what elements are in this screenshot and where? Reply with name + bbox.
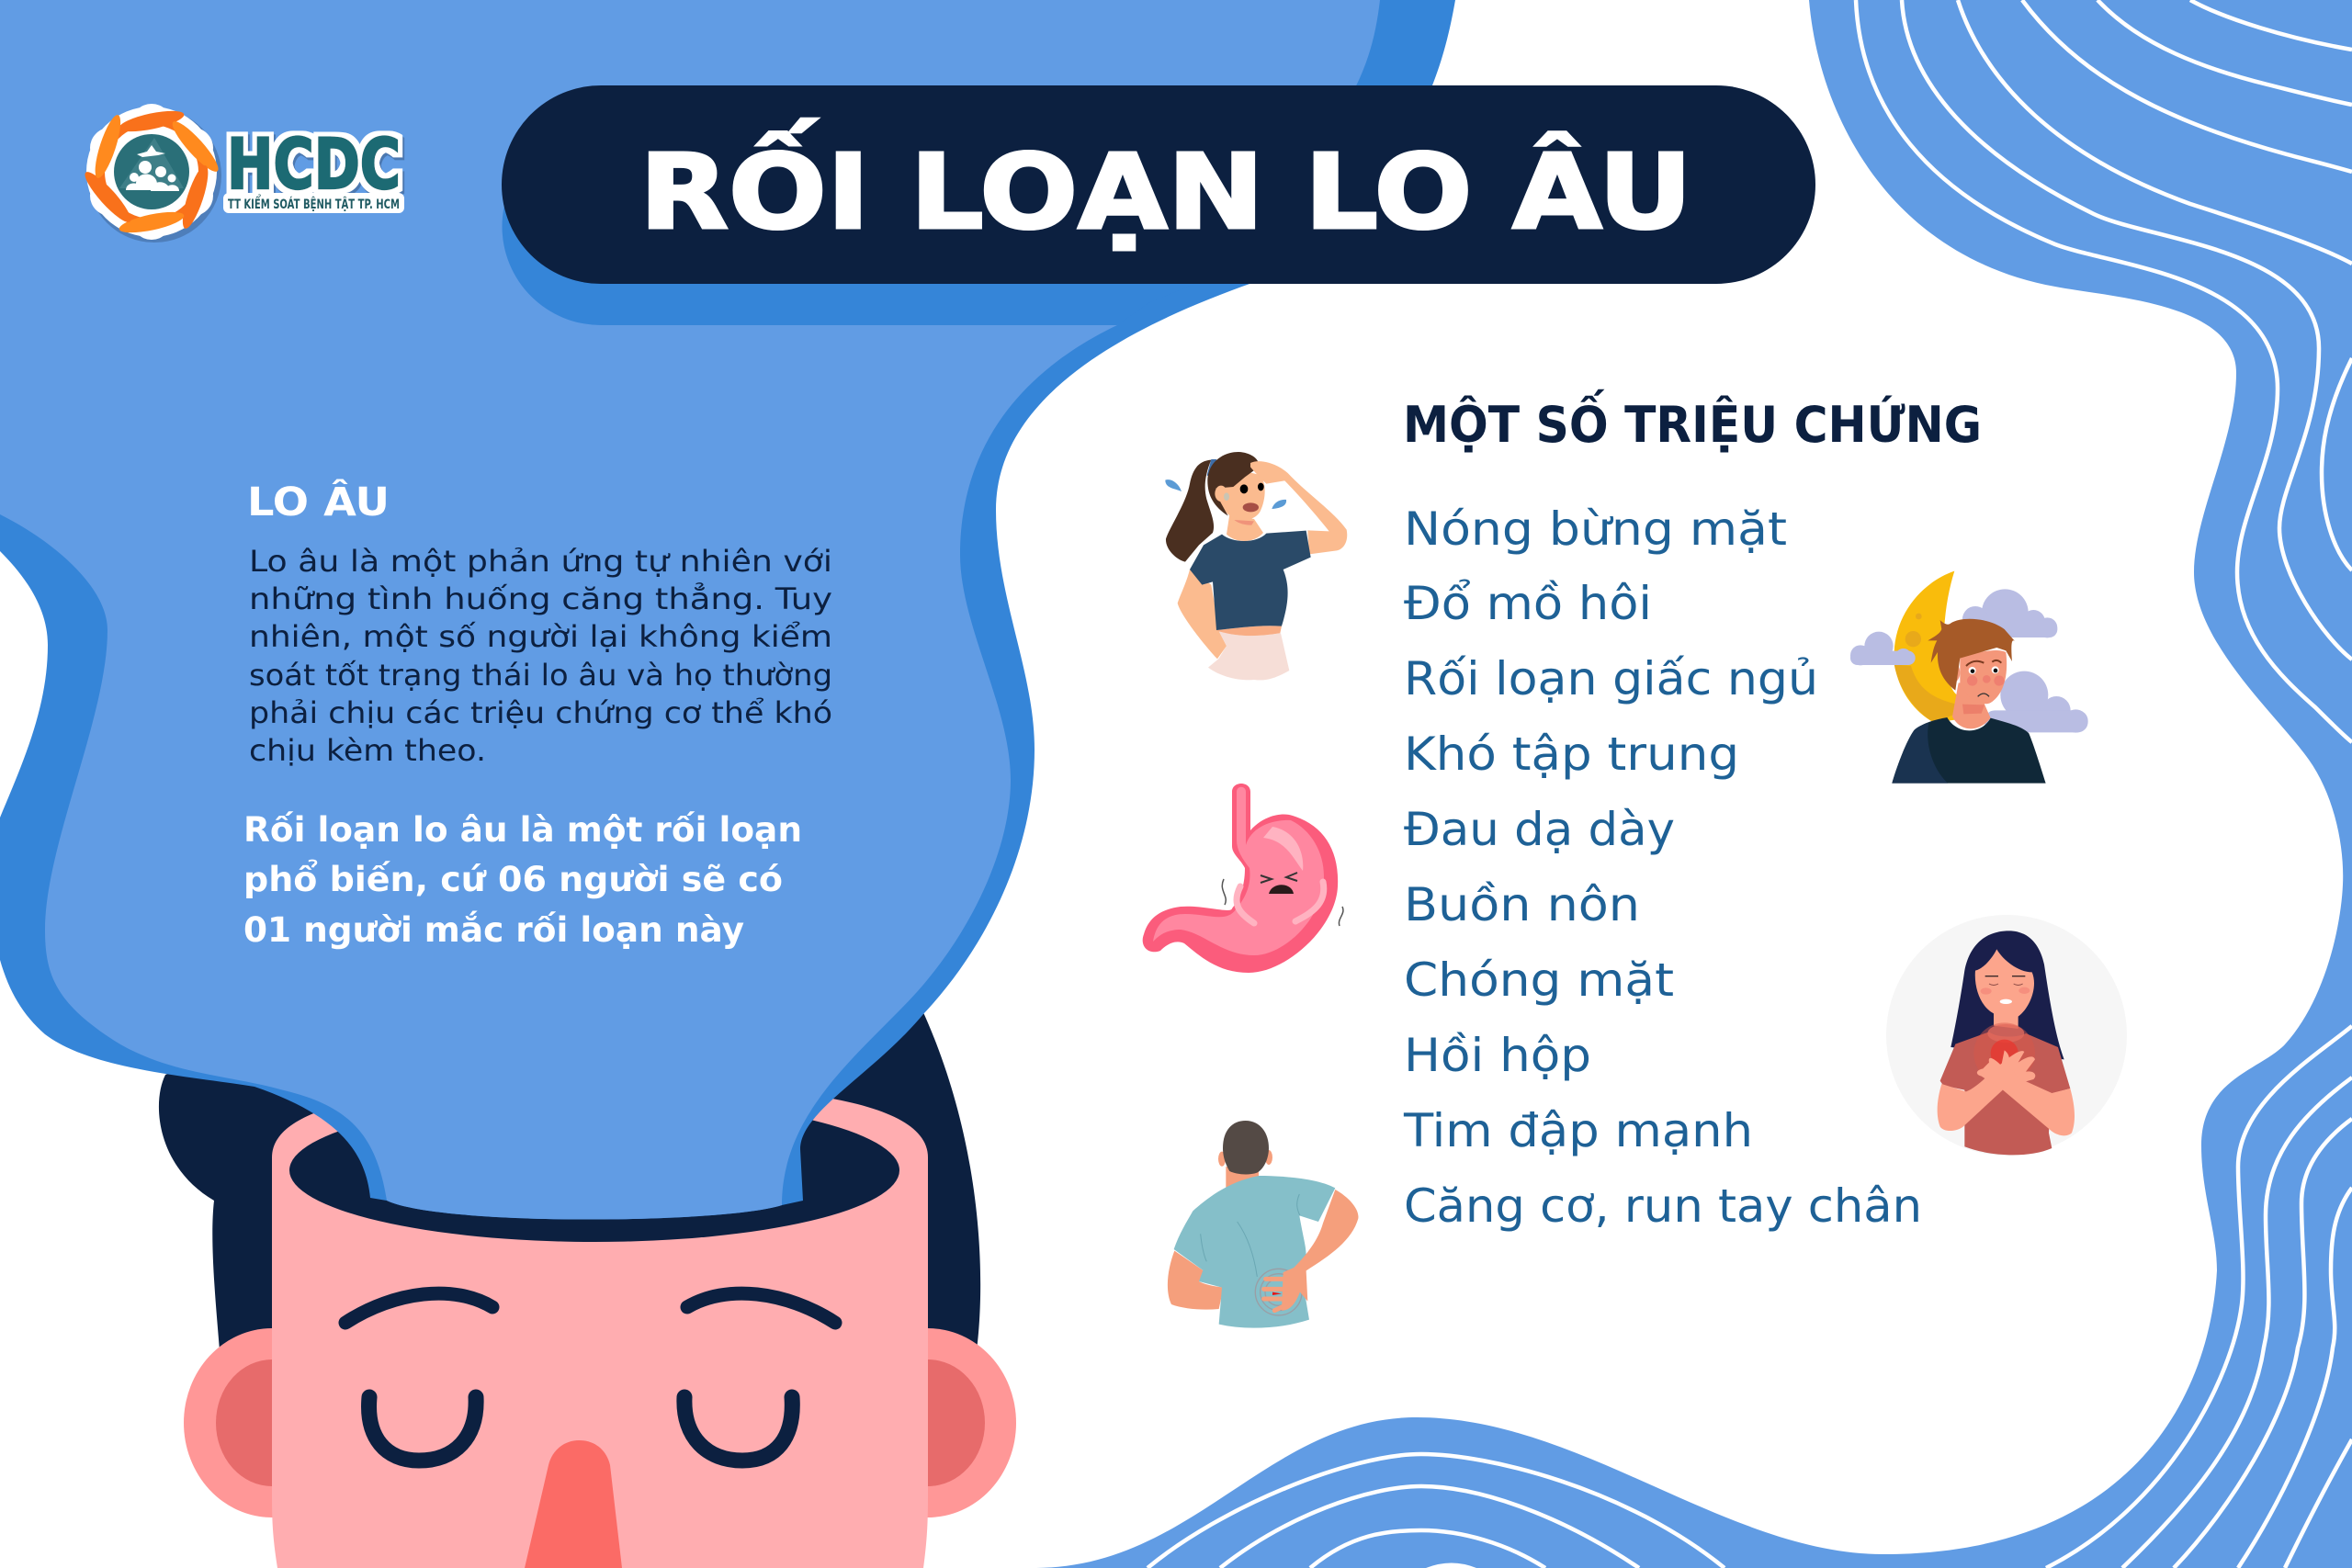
left ear <box>184 1328 360 1517</box>
logo tagline: TT KIỂM SOÁT BỆNH TẬT TP. HCM <box>228 194 400 212</box>
symptom list <box>1403 502 1922 1233</box>
icon: man with moon and clouds <box>1850 571 2088 784</box>
symptom list: Tim đập mạnh <box>1403 1104 1753 1157</box>
paragraph: phải chịu các triệu chứng cơ thể khó <box>249 695 832 730</box>
highlighted statement: Rối loạn lo âu là một rối loạn <box>243 810 802 850</box>
paragraph: chịu kèm theo. <box>249 733 486 768</box>
highlighted statement: phổ biến, cứ 06 người sẽ có <box>243 860 783 899</box>
decorative wave: right and bottom <box>1036 0 2352 1568</box>
symptom list: Đổ mồ hôi <box>1404 577 1652 630</box>
hair <box>159 919 980 1350</box>
icon: man with back pain <box>1168 1121 1358 1328</box>
right ear <box>840 1328 1016 1517</box>
paragraph: soát tốt trạng thái lo âu và họ thường <box>249 658 832 693</box>
open head hole <box>289 1099 899 1242</box>
symptom list: Buồn nôn <box>1404 878 1640 931</box>
heading: Lo âu: LO ÂU <box>247 479 390 525</box>
highlighted statement: 01 người mắc rối loạn này <box>243 910 744 950</box>
highlighted statement <box>243 810 802 950</box>
logo: HCDC <box>80 104 404 243</box>
icon: woman with chest pain <box>1886 915 2127 1156</box>
symptom list: Hồi hộp <box>1404 1029 1591 1082</box>
symptom list: Đau dạ dày <box>1404 803 1675 856</box>
symptom list: Căng cơ, run tay chân <box>1404 1179 1922 1233</box>
illustration: head with open top <box>159 919 1016 1568</box>
symptom list: Rối loạn giấc ngủ <box>1404 652 1818 705</box>
nose <box>525 1440 622 1568</box>
symptom list: Chóng mặt <box>1404 953 1674 1007</box>
logo wordmark: HCDC <box>227 123 401 205</box>
paragraph: nhiên, một số người lại không kiểm <box>249 619 832 654</box>
closed eyes <box>369 1397 792 1461</box>
symptom list: Khó tập trung <box>1404 728 1739 781</box>
eyebrows <box>345 1293 835 1323</box>
symptom list: Nóng bừng mặt <box>1404 502 1787 556</box>
text block: Lo âu <box>243 479 832 950</box>
icon: woman sweating <box>1165 452 1347 680</box>
title text: RỐI LOẠN LO ÂU <box>639 119 1692 253</box>
title banner <box>502 85 1815 325</box>
paragraph: những tình huống căng thẳng. Tuy <box>249 581 832 616</box>
paragraph: Lo âu là một phản ứng tự nhiên với <box>249 544 832 579</box>
face <box>272 1084 928 1568</box>
logo emblem <box>80 104 223 243</box>
icon: stomach in pain <box>1143 784 1343 973</box>
paragraph <box>249 544 832 768</box>
heading: symptoms: MỘT SỐ TRIỆU CHỨNG <box>1403 389 1982 454</box>
thought blob: dark back layer <box>0 0 1455 1220</box>
logo tagline <box>223 193 404 213</box>
thought blob: light front layer <box>0 0 1380 1220</box>
